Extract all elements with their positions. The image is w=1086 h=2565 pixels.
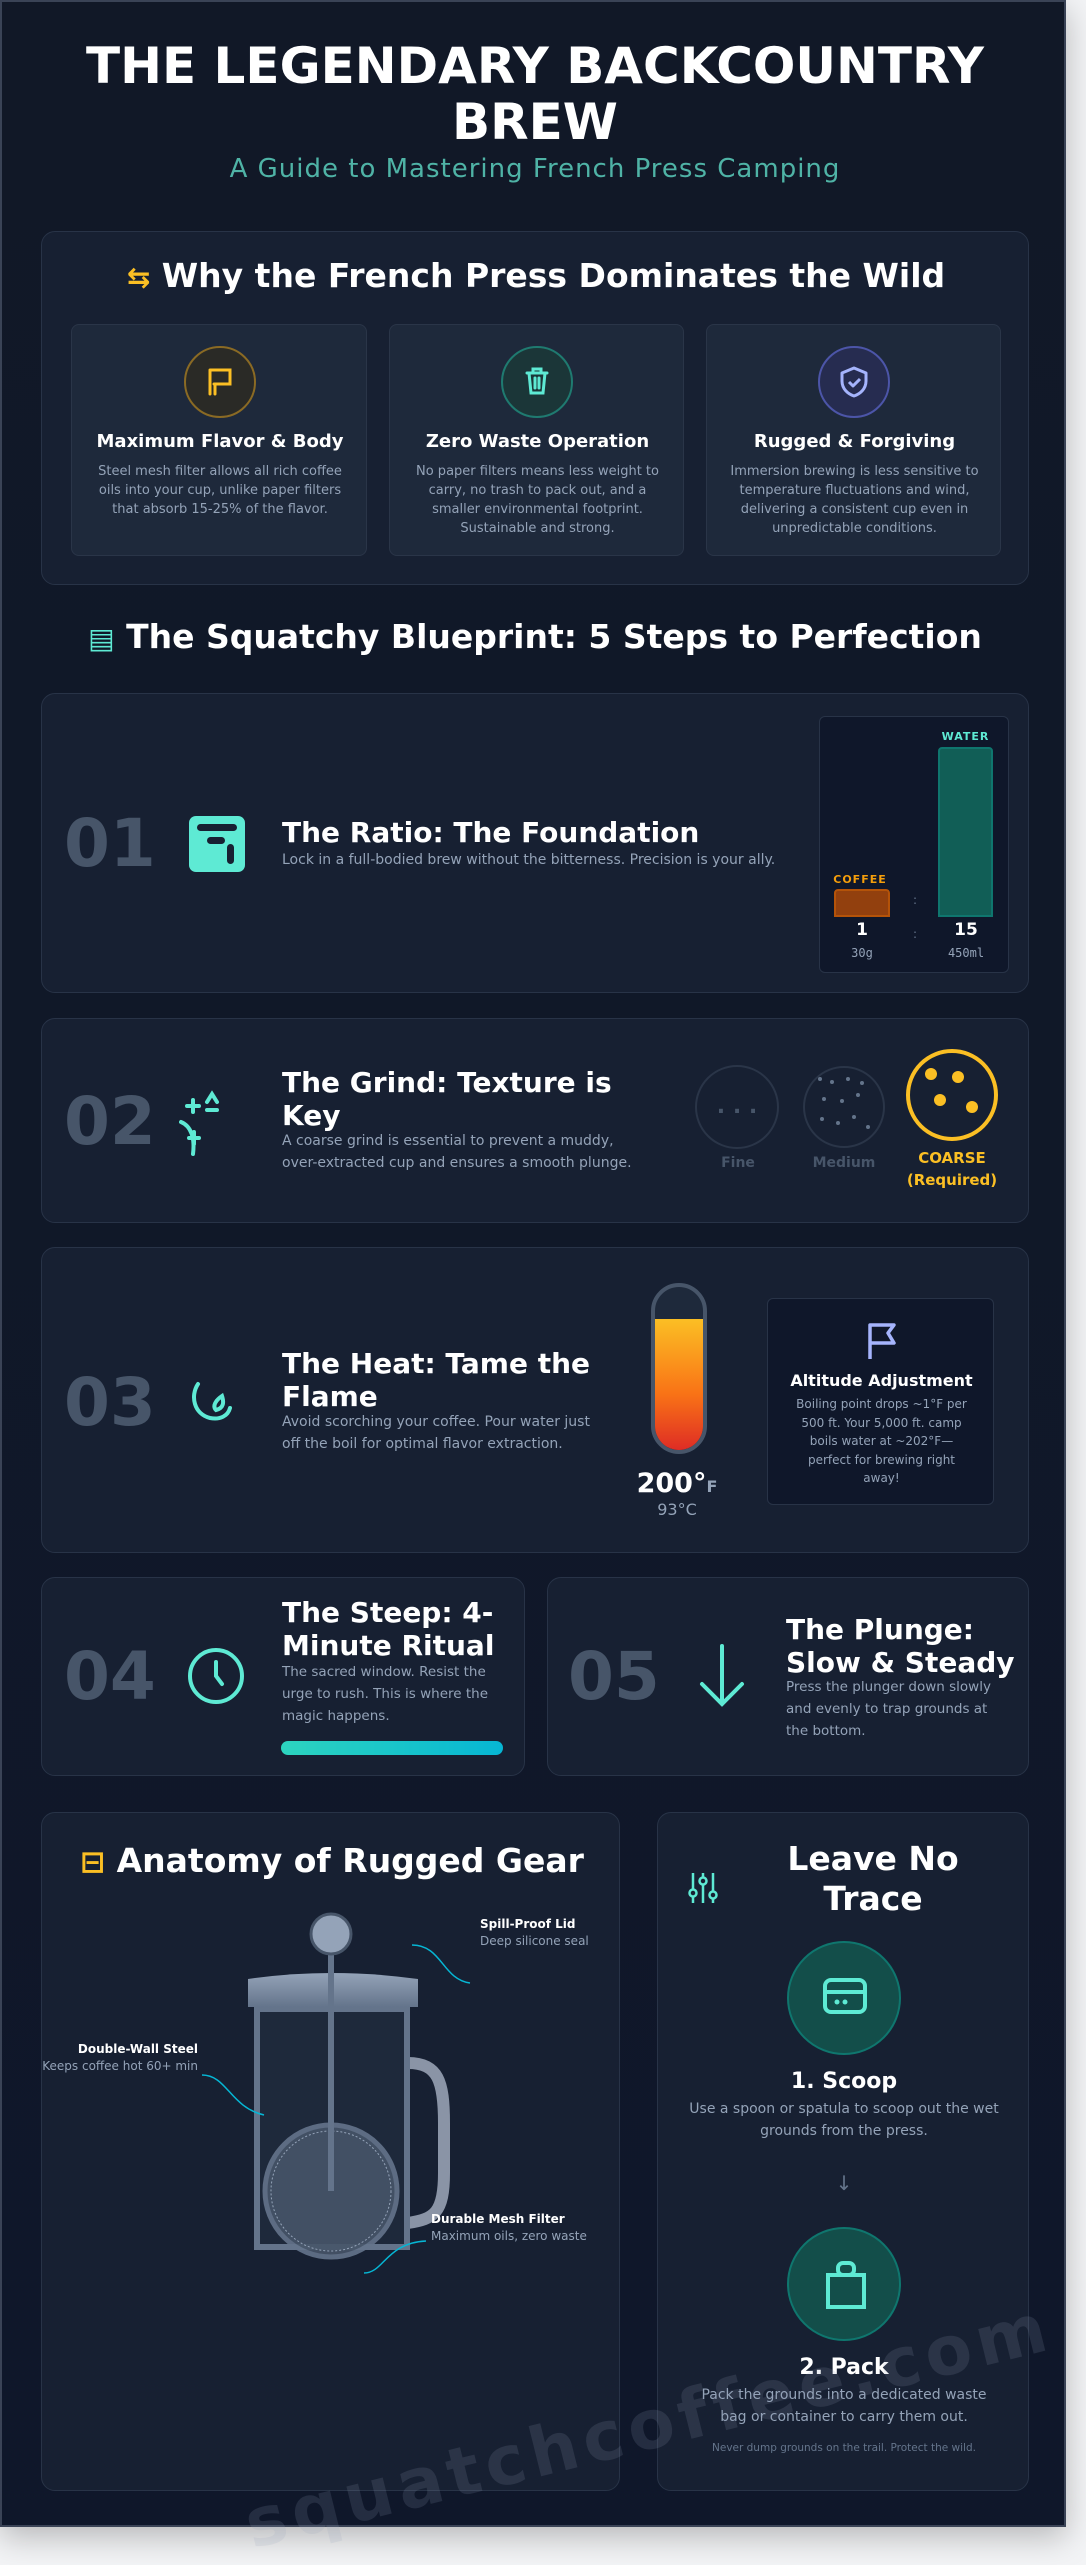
- icon: arrow down: [700, 1644, 744, 1707]
- label: steel: Double-Wall Steel: [78, 2042, 198, 2056]
- chart: ratio bars: :: [913, 927, 917, 941]
- chart: ratio bars: :: [913, 893, 917, 907]
- heading: blueprint: ▤ The Squatchy Blueprint: 5 Steps to Perfection: [88, 617, 982, 656]
- chart: ratio bars: WATER: [942, 730, 989, 743]
- card: zero waste: [389, 324, 684, 556]
- arrow: ↓: [836, 2171, 852, 2195]
- callout: altitude: Boiling point drops ~1°F per 500 ft. Your 5,000 ft. camp boils water at ~202°F—perfect for brewing right away!: [796, 1397, 967, 1485]
- step title: The Ratio: The Foundation: [282, 816, 699, 849]
- panel: why french press: [41, 231, 1029, 585]
- panel: step 2 grind: [41, 1018, 1029, 1223]
- card: zero waste: No paper filters means less weight to carry, no trash to pack out, and a smaller environmental footprint. Sustainable and strong.: [416, 464, 659, 536]
- step desc: and evenly to trap grounds at: [786, 1701, 987, 1717]
- icon: sliders: [688, 1873, 718, 1903]
- step title: [282, 1596, 494, 1662]
- step desc: Lock in a full-bodied brew without the bitterness. Precision is your ally.: [282, 852, 775, 868]
- step desc: off the boil for optimal flavor extraction.: [282, 1436, 563, 1452]
- title: [86, 37, 984, 151]
- label: lid: Spill-Proof Lid: [480, 1917, 576, 1931]
- heading: anatomy: ⊟ Anatomy of Rugged Gear: [80, 1841, 584, 1880]
- step title: Slow & Steady: [786, 1646, 1015, 1679]
- heading: why: ⇆ Why the French Press Dominates the Wild: [127, 256, 945, 295]
- callout: altitude: [767, 1298, 994, 1505]
- step: pack: Never dump grounds on the trail. Protect the wild.: [712, 2442, 976, 2454]
- step desc: [282, 1133, 632, 1171]
- heading: leave no trace: Leave No: [787, 1839, 959, 1878]
- step: pack: [701, 2227, 987, 2454]
- grind: coarse: (Required): [907, 1171, 997, 1189]
- step desc: [282, 1414, 590, 1452]
- heading: leave no trace: [787, 1839, 959, 1918]
- number 05: 05: [568, 1638, 660, 1715]
- label: lid: Deep silicone seal: [480, 1934, 589, 1948]
- step desc: [786, 1679, 991, 1739]
- icon: trash: [501, 346, 573, 418]
- grind: fine: [695, 1065, 779, 1171]
- progress bar: [281, 1741, 503, 1755]
- step desc: over-extracted cup and ensures a smooth plunge.: [282, 1155, 632, 1171]
- label: lid: [480, 1917, 589, 1948]
- step: pack: Pack the grounds into a dedicated waste bag or container to carry them out.: [701, 2387, 987, 2425]
- grind: medium: Medium: [813, 1155, 875, 1171]
- step desc: Press the plunger down slowly: [786, 1679, 991, 1695]
- label: mesh: Durable Mesh Filter: [431, 2212, 565, 2226]
- step title: Minute Ritual: [282, 1629, 494, 1662]
- number 04: 04: [64, 1638, 156, 1715]
- step: scoop: Use a spoon or spatula to scoop out the wet grounds from the press.: [689, 2101, 999, 2139]
- panel: step 5 plunge: [547, 1577, 1029, 1776]
- temperature: 200°F: [637, 1468, 717, 1499]
- icon: ratio: [189, 816, 245, 872]
- title: THE LEGENDARY BACKCOUNTRY: [86, 37, 984, 95]
- number 03: 03: [64, 1364, 156, 1441]
- panel: step 3 heat: 93°C: [657, 1500, 697, 1519]
- card: rugged: Immersion brewing is less sensitive to temperature fluctuations and wind, delivering a consistent cup even in unpredictable conditions.: [730, 464, 979, 536]
- chart: ratio bars: COFFEE: [833, 873, 887, 886]
- panel: step 1 ratio: [41, 693, 1029, 993]
- step: pack: 2. Pack: [799, 2355, 889, 2380]
- panel: step 4 steep: [41, 1577, 525, 1776]
- icon: flame: [192, 1382, 232, 1420]
- panel: anatomy: [41, 1812, 620, 2491]
- heading: leave no trace: Trace: [823, 1879, 923, 1918]
- card: rugged: Rugged & Forgiving: [754, 431, 955, 452]
- label: mesh: Maximum oils, zero waste: [431, 2229, 587, 2243]
- step desc: the bottom.: [786, 1723, 866, 1739]
- diagram: french press: [202, 1912, 470, 2274]
- step title: The Steep: 4-: [282, 1596, 493, 1629]
- chart: ratio bars: 1: [856, 920, 868, 940]
- chart: ratio bars: 30g: [851, 946, 873, 960]
- title: BREW: [452, 93, 618, 151]
- thermometer: [651, 1283, 707, 1454]
- step: scoop: 1. Scoop: [791, 2069, 897, 2094]
- step title: The Heat: Tame the: [282, 1347, 590, 1380]
- step: scoop: [689, 1941, 999, 2139]
- label: steel: [42, 2042, 198, 2073]
- number 01: 01: [64, 805, 156, 882]
- grind: medium: [803, 1066, 885, 1171]
- step title: [786, 1613, 1015, 1679]
- card: flavor: [71, 324, 367, 556]
- step desc: [282, 1664, 488, 1724]
- icon: flag: [184, 346, 256, 418]
- card: flavor: Steel mesh filter allows all rich coffee oils into your cup, unlike paper filters that absorb 15-25% of the flavor.: [98, 464, 342, 517]
- icon: clock: [188, 1648, 244, 1704]
- card: flavor: Maximum Flavor & Body: [97, 431, 343, 452]
- chart: ratio bars: 450ml: [948, 946, 984, 960]
- step title: The Plunge:: [786, 1613, 974, 1646]
- step desc: magic happens.: [282, 1708, 390, 1724]
- chart: ratio bars: [819, 716, 1009, 973]
- step desc: Avoid scorching your coffee. Pour water just: [282, 1414, 590, 1430]
- grind: fine: . . .: [717, 1094, 757, 1119]
- step title: The Grind: Texture is: [282, 1066, 612, 1099]
- step title: Flame: [282, 1380, 378, 1413]
- panel: step 3 heat: [41, 1247, 1029, 1553]
- step desc: A coarse grind is essential to prevent a muddy,: [282, 1133, 614, 1149]
- step desc: The sacred window. Resist the: [282, 1664, 486, 1680]
- grind: coarse: [906, 1049, 998, 1189]
- label: steel: Keeps coffee hot 60+ min: [42, 2059, 198, 2073]
- card: rugged: [706, 324, 1001, 556]
- subtitle: A Guide to Mastering French Press Camping: [230, 154, 840, 184]
- step desc: urge to rush. This is where the: [282, 1686, 488, 1702]
- panel: leave no trace: [657, 1812, 1029, 2491]
- card: zero waste: Zero Waste Operation: [426, 431, 649, 452]
- step title: [282, 1347, 590, 1413]
- number 02: 02: [64, 1083, 156, 1160]
- grind: coarse: COARSE: [918, 1149, 986, 1167]
- step title: [282, 1066, 612, 1132]
- icon: shield: [818, 346, 890, 418]
- label: mesh: [431, 2212, 587, 2243]
- grind: fine: Fine: [721, 1155, 755, 1171]
- icon: grind: [179, 1090, 220, 1156]
- watermark: squatchcoffee.com: [237, 2288, 1060, 2565]
- chart: ratio bars: 15: [954, 920, 978, 940]
- callout: altitude: Altitude Adjustment: [790, 1371, 973, 1390]
- step title: Key: [282, 1099, 340, 1132]
